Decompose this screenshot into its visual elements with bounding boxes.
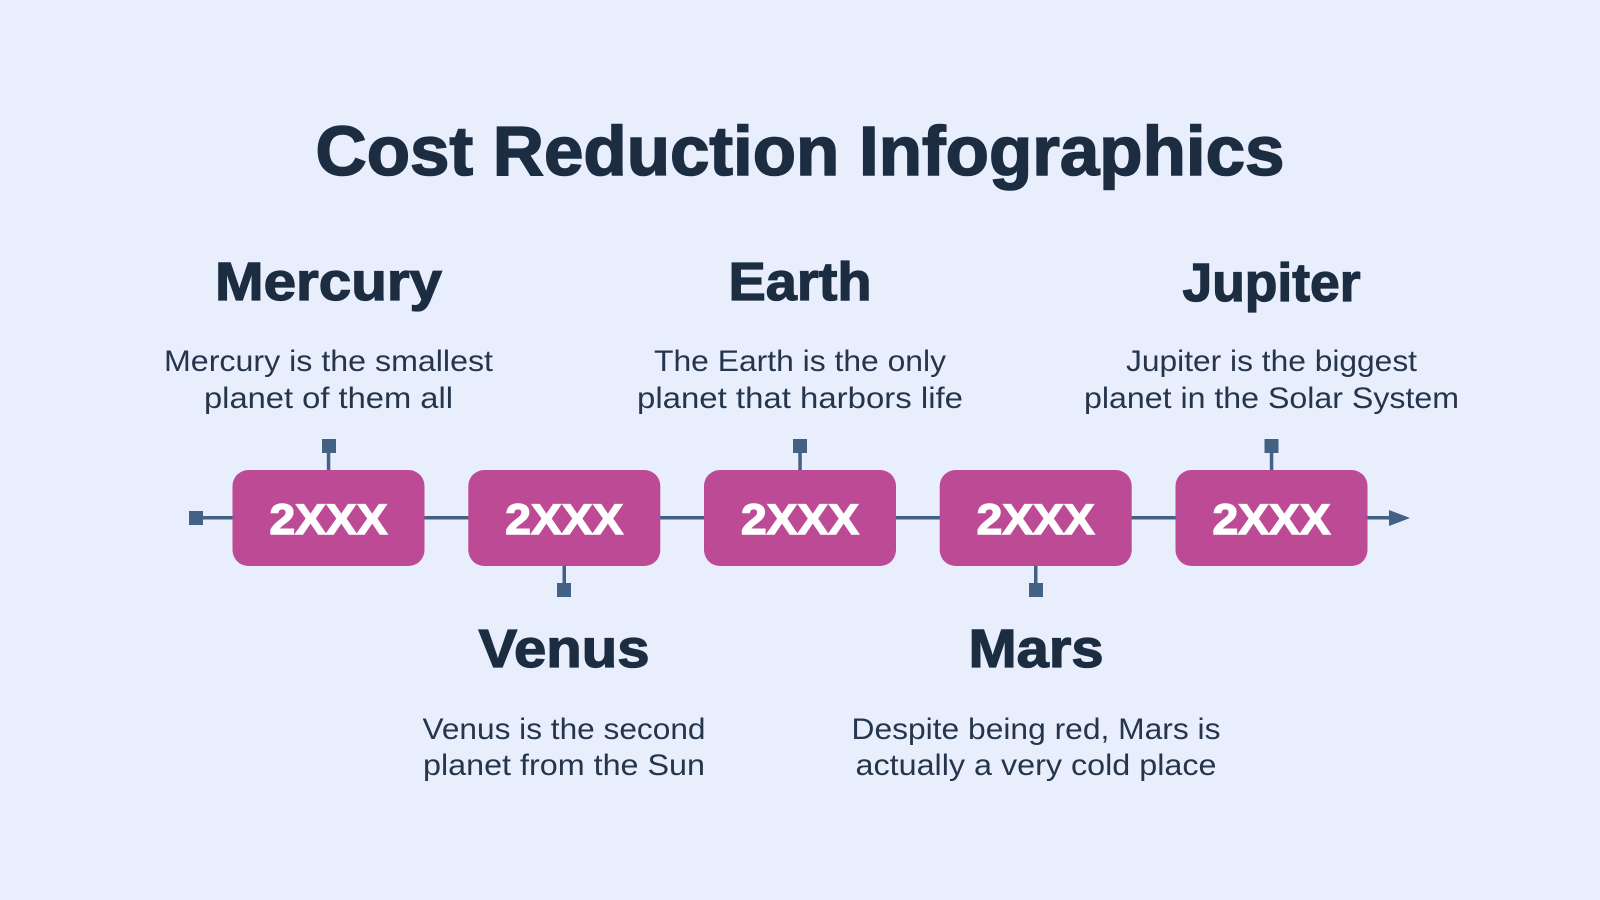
text block: Earth: The Earth is the only — [654, 345, 946, 378]
year box: Venus — [468, 470, 660, 597]
text block: Venus: Venus — [478, 619, 650, 679]
year box: Mars: 2XXX — [977, 496, 1095, 544]
text block: Mercury — [164, 252, 494, 415]
year box: Mars — [940, 470, 1132, 597]
text block: Mars: Mars — [968, 619, 1104, 679]
text block: Venus — [422, 619, 706, 782]
text block: Earth: Earth — [728, 252, 872, 312]
year box: Mercury — [232, 439, 424, 566]
text block: Jupiter: Jupiter — [1182, 253, 1360, 313]
text block: Jupiter: planet in the Solar System — [1084, 382, 1459, 415]
timeline — [189, 439, 1410, 597]
text block: Venus: Venus is the second — [422, 713, 706, 746]
title: Cost Reduction Infographics — [316, 112, 1284, 190]
timeline axis line — [200, 516, 1395, 520]
arrow head — [1389, 510, 1410, 526]
year box: Earth — [704, 439, 896, 566]
text block: Mars: actually a very cold place — [856, 749, 1216, 782]
text block: Earth: planet that harbors life — [637, 382, 963, 415]
text block: Jupiter — [1084, 253, 1459, 415]
text block: Earth — [637, 252, 963, 415]
text block: Mercury: planet of them all — [204, 382, 453, 415]
start marker — [189, 511, 203, 525]
year box: Jupiter — [1176, 439, 1368, 566]
text block: Mercury: Mercury — [215, 252, 442, 312]
text block: Mercury: Mercury is the smallest — [164, 345, 494, 378]
year box: Mercury: 2XXX — [270, 496, 388, 544]
text block: Venus: planet from the Sun — [423, 749, 705, 782]
text block: Mars: Despite being red, Mars is — [852, 713, 1220, 746]
year box: Jupiter: 2XXX — [1212, 496, 1331, 544]
year box: Earth: 2XXX — [741, 496, 859, 544]
text block: Mars — [852, 619, 1220, 782]
year box: Venus: 2XXX — [505, 496, 624, 544]
text block: Jupiter: Jupiter is the biggest — [1126, 345, 1418, 378]
